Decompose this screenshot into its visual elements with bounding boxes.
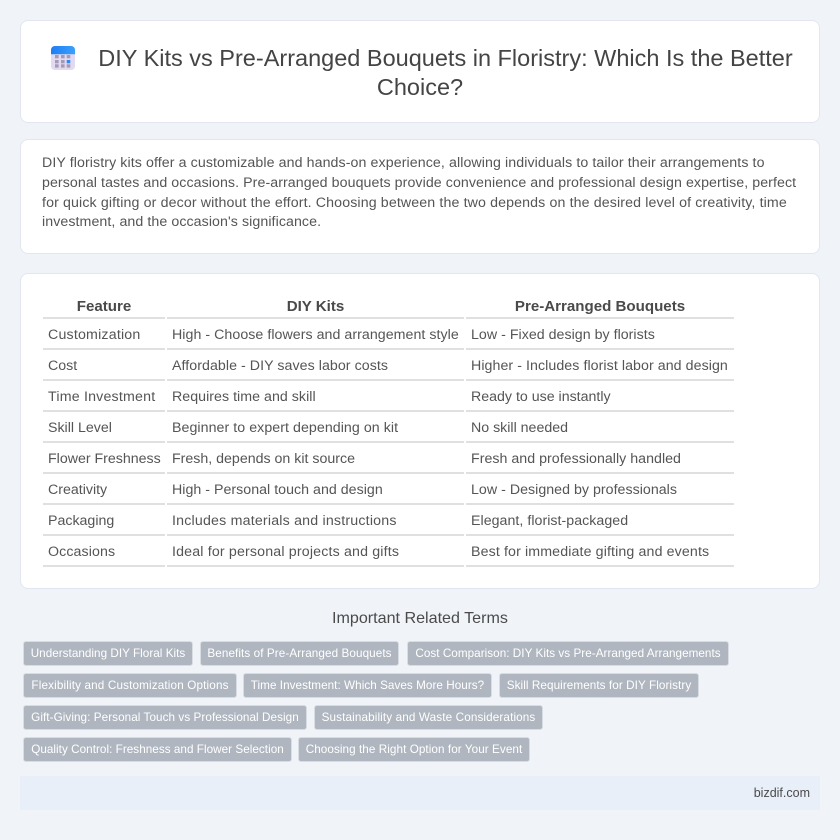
- comparison table: Cost: [48, 358, 77, 374]
- intro card: [20, 139, 820, 254]
- related terms heading: Important Related Terms: [332, 609, 508, 627]
- comparison table: Occasions: [48, 544, 115, 560]
- title: DIY Kits vs Pre-Arranged Bouquets in Floristry: Which Is the Better Choice?: [98, 45, 793, 100]
- comparison table: Time Investment: [48, 389, 155, 405]
- comparison table: Skill Level: [48, 420, 112, 436]
- table card: [20, 273, 820, 589]
- tag: [200, 641, 399, 666]
- tag: [499, 673, 699, 698]
- tag: Skill Requirements for DIY Floristry: [507, 679, 691, 692]
- tag: Understanding DIY Floral Kits: [31, 647, 185, 660]
- header row: Feature: [77, 298, 131, 315]
- comparison table: Low - Designed by professionals: [471, 482, 677, 498]
- comparison table: No skill needed: [471, 420, 568, 436]
- comparison table: Ideal for personal projects and gifts: [172, 544, 399, 560]
- comparison table: Best for immediate gifting and events: [471, 544, 709, 560]
- intro text: personal tastes and occasions. Pre-arranged bouquets provide convenience and professional design expertise, perfect: [42, 175, 796, 191]
- tag: [23, 705, 307, 730]
- footer source: bizdif.com: [754, 786, 810, 800]
- tag: Benefits of Pre-Arranged Bouquets: [207, 647, 392, 660]
- tag: Quality Control: Freshness and Flower Selection: [31, 743, 284, 756]
- tag: Gift-Giving: Personal Touch vs Professional Design: [31, 711, 299, 724]
- tag: [314, 705, 543, 730]
- tag: Choosing the Right Option for Your Event: [306, 743, 522, 756]
- comparison table: Affordable - DIY saves labor costs: [172, 358, 388, 374]
- comparison table: Fresh, depends on kit source: [172, 451, 355, 467]
- tag: Flexibility and Customization Options: [31, 679, 229, 692]
- tag: [407, 641, 729, 666]
- intro text: [42, 155, 796, 230]
- header row: [77, 298, 685, 315]
- tag: [23, 641, 193, 666]
- tag: [243, 673, 492, 698]
- tag: [23, 737, 292, 762]
- header row: Pre-Arranged Bouquets: [515, 298, 685, 315]
- comparison table: Packaging: [48, 513, 114, 529]
- comparison table: High - Choose flowers and arrangement style: [172, 327, 459, 343]
- comparison table: Requires time and skill: [172, 389, 316, 405]
- comparison table: [43, 298, 734, 567]
- tag: Cost Comparison: DIY Kits vs Pre-Arranged Arrangements: [415, 647, 721, 660]
- comparison table: Beginner to expert depending on kit: [172, 420, 398, 436]
- related terms tags: [23, 641, 729, 762]
- tag: [23, 673, 237, 698]
- tag: Time Investment: Which Saves More Hours?: [251, 679, 484, 692]
- comparison table: Includes materials and instructions: [172, 513, 397, 529]
- intro text: DIY floristry kits offer a customizable and hands-on experience, allowing individuals to tailor their arrangements to: [42, 155, 765, 171]
- comparison table: Higher - Includes florist labor and design: [471, 358, 728, 374]
- header row: DIY Kits: [287, 298, 344, 315]
- comparison table: Elegant, florist-packaged: [471, 513, 628, 529]
- comparison table: Flower Freshness: [48, 451, 161, 467]
- comparison table: High - Personal touch and design: [172, 482, 383, 498]
- comparison table: Low - Fixed design by florists: [471, 327, 655, 343]
- tag: [298, 737, 530, 762]
- tag: Sustainability and Waste Considerations: [322, 711, 535, 724]
- intro text: for quick gifting or decor without the effort. Choosing between the two depends on the desired level of creativity, time: [42, 195, 787, 211]
- comparison table: Customization: [48, 327, 140, 343]
- icon: calendar: [51, 46, 75, 70]
- comparison table: Creativity: [48, 482, 107, 498]
- comparison table: Ready to use instantly: [471, 389, 611, 405]
- intro text: investment, and the occasion's significance.: [42, 214, 321, 230]
- title card: [20, 20, 820, 123]
- footer bar: [20, 776, 820, 810]
- comparison table: Fresh and professionally handled: [471, 451, 681, 467]
